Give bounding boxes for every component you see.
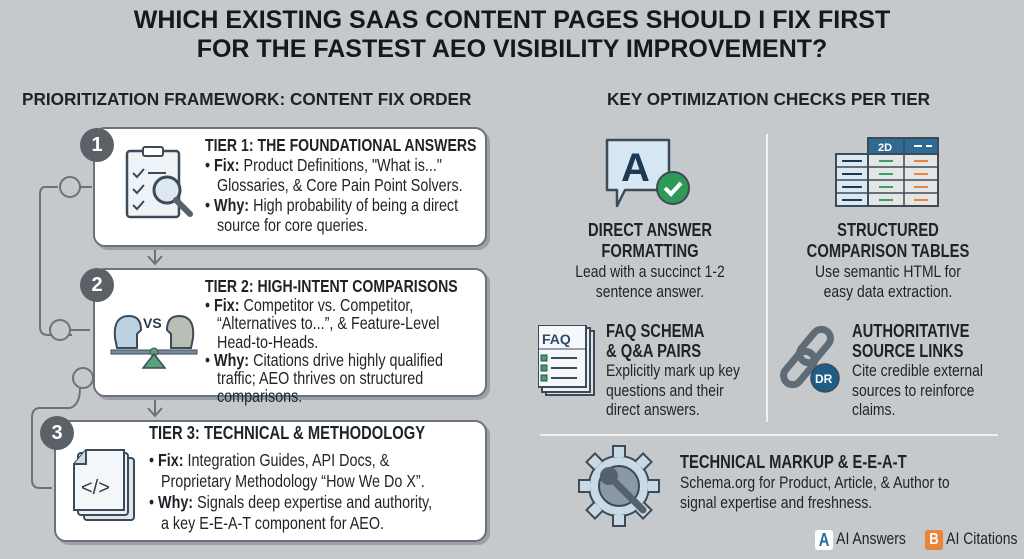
icon: chain link with DR [780, 326, 840, 393]
badge 1: 1 [91, 134, 103, 156]
tier 2 text: traffic; AEO thrives on structured [217, 368, 423, 388]
check: comparison tables: STRUCTURED [837, 220, 939, 240]
tier 3 text: • Why: Signals deep expertise and authority, [149, 492, 432, 512]
check: technical markup [680, 452, 950, 512]
tier 1 text: • Why: High probability of being a direct [205, 195, 458, 215]
check: authoritative links: Cite credible external [852, 361, 983, 380]
check: FAQ schema: direct answers. [606, 400, 700, 419]
check: authoritative links: SOURCE LINKS [852, 340, 964, 360]
badge 1 [80, 128, 114, 162]
tier 2 text: TIER 2: HIGH-INTENT COMPARISONS [205, 276, 458, 296]
icon: FAQ pages [538, 325, 595, 396]
tier 3 text: Proprietary Methodology “How We Do X”. [161, 471, 425, 491]
tier 2 text [205, 276, 458, 406]
title [134, 6, 890, 63]
check: direct answer [575, 220, 725, 301]
check: FAQ schema: & Q&A PAIRS [606, 340, 701, 360]
tier 2 text: • Why: Citations drive highly qualified [205, 350, 443, 370]
check: comparison tables: COMPARISON TABLES [807, 241, 969, 261]
icon: direct answer bubble [606, 138, 690, 208]
title: WHICH EXISTING SAAS CONTENT PAGES SHOULD I FIX FIRST [134, 6, 890, 34]
legend: AI Answers: A [819, 530, 829, 550]
check: comparison tables: easy data extraction. [824, 282, 952, 301]
icon: FAQ pages: FAQ [542, 331, 571, 347]
badge 2 [80, 268, 114, 302]
tier 2 text: comparisons. [217, 386, 302, 406]
check: authoritative links: AUTHORITATIVE [852, 321, 970, 341]
check: FAQ schema: questions and their [606, 380, 724, 400]
check: direct answer: sentence answer. [596, 282, 704, 301]
icon: vs heads on scale [110, 315, 198, 369]
check: technical markup: TECHNICAL MARKUP & E-E-A-T [680, 452, 907, 472]
icon: chain link with DR: DR [815, 372, 833, 386]
check: technical markup: Schema.org for Product, Article, & Author to [680, 473, 950, 492]
tier 1 text: TIER 1: THE FOUNDATIONAL ANSWERS [205, 135, 476, 155]
icon: code document [73, 449, 135, 521]
tier 3 text: • Fix: Integration Guides, API Docs, & [149, 450, 389, 470]
badge 3: 3 [51, 422, 63, 444]
tier 3 text: a key E-E-A-T component for AEO. [161, 513, 384, 533]
tier 3 text [149, 423, 432, 533]
icon: gear with wrench [578, 445, 660, 527]
title: FOR THE FASTEST AEO VISIBILITY IMPROVEMENT? [197, 35, 827, 63]
icon: code document: </> [81, 477, 110, 499]
connector lines [31, 176, 163, 489]
check: technical markup: signal expertise and freshness. [680, 493, 872, 512]
tier 1 text: Glossaries, & Core Pain Point Solvers. [217, 175, 463, 195]
check: direct answer: Lead with a succinct 1-2 [575, 262, 725, 281]
tier 2 text: Head-to-Heads. [217, 332, 318, 352]
legend: AI Citations: AI Citations [946, 529, 1017, 548]
legend [815, 529, 1017, 550]
icon: direct answer bubble: A [621, 146, 650, 190]
panel: tier 3 [54, 420, 487, 542]
tier 1 text: • Fix: Product Definitions, "What is..." [205, 155, 442, 175]
check: authoritative links [852, 321, 983, 419]
check: direct answer: DIRECT ANSWER [588, 220, 712, 240]
badge 2: 2 [91, 274, 103, 296]
tier 2 text: “Alternatives to...”, & Feature-Level [217, 313, 439, 333]
panel: tier 2 [93, 268, 487, 397]
check: authoritative links: sources to reinforce [852, 380, 974, 400]
check: FAQ schema: Explicitly mark up key [606, 361, 740, 380]
check: authoritative links: claims. [852, 400, 895, 419]
check: FAQ schema: FAQ SCHEMA [606, 321, 704, 341]
panel: tier 1 [93, 127, 487, 247]
legend: AI Answers: AI Answers [836, 529, 906, 548]
icon: clipboard with magnifier [126, 146, 193, 218]
icon: comparison table [835, 137, 939, 207]
check: FAQ schema [606, 321, 740, 419]
tier 3 text: TIER 3: TECHNICAL & METHODOLOGY [149, 423, 425, 443]
legend: AI Citations: B [929, 531, 939, 548]
tier 1 text [205, 135, 476, 235]
right header: KEY OPTIMIZATION CHECKS PER TIER [607, 89, 930, 109]
tier 1 text: source for core queries. [217, 215, 368, 235]
dividers [766, 134, 768, 422]
legend: AI Answers [815, 529, 906, 550]
tier 2 text: • Fix: Competitor vs. Competitor, [205, 295, 413, 315]
icon: comparison table: 2D [878, 142, 892, 154]
legend: AI Citations [925, 529, 1017, 550]
check: direct answer: FORMATTING [601, 241, 699, 261]
check: comparison tables: Use semantic HTML for [815, 262, 961, 281]
badge 3 [40, 416, 74, 450]
left header: PRIORITIZATION FRAMEWORK: CONTENT FIX ORDER [22, 89, 471, 109]
check: comparison tables [807, 220, 969, 301]
icon: vs heads on scale: VS [143, 315, 162, 331]
